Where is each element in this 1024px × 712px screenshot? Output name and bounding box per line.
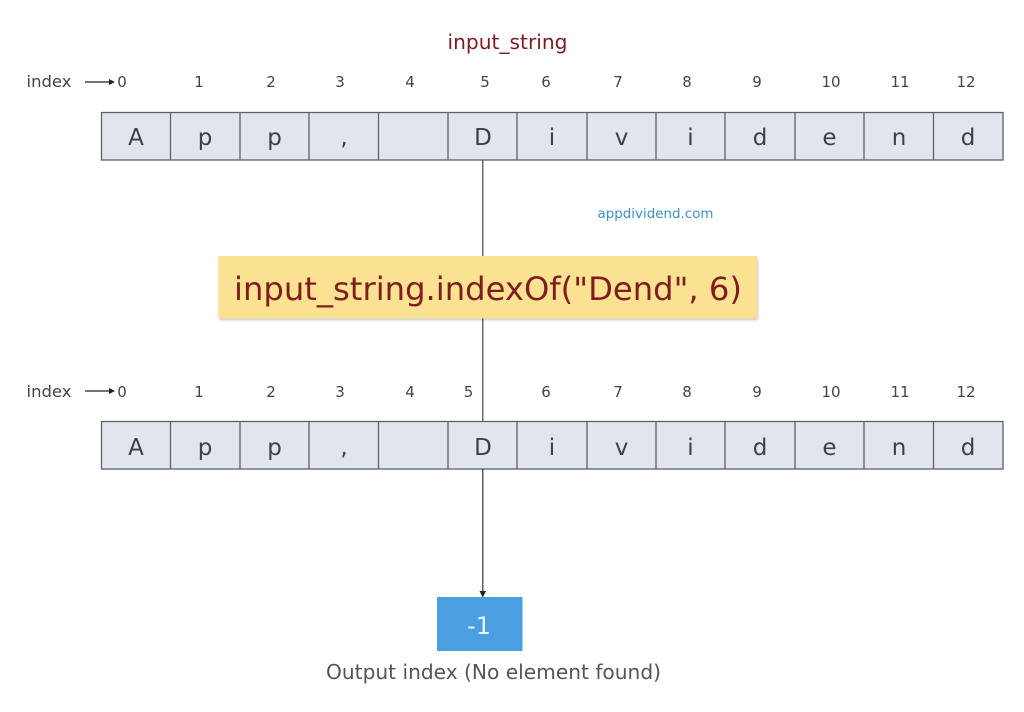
output box: -1: -1 [467,612,491,640]
bottom index row: 12 [956,383,976,401]
bottom index row: 10 [821,383,841,401]
connector: top array to second array [482,160,484,421]
bottom index row: 8 [682,383,692,401]
bottom character array: n [892,435,906,461]
callout: method call [218,256,758,320]
top index row: 1 [194,73,204,91]
top character array: i [687,125,694,151]
bottom index row: 1 [194,383,204,401]
top index row: index [26,72,72,91]
bottom index row: 0 [117,383,127,401]
bottom index row: index [26,382,72,401]
bottom character array: v [615,435,628,461]
bottom character array: D [474,435,492,461]
top character array: , [340,125,348,151]
top character array: d [753,125,767,151]
top character array: p [267,125,282,151]
bottom character array: i [687,435,694,461]
output label: Output index (No element found) [326,660,661,684]
bottom index row: 5 [464,383,473,401]
arrow: top index pointer [85,79,115,85]
top character array: d [961,125,975,151]
top index row: 7 [613,73,623,91]
top character array: v [615,125,628,151]
bottom character array: i [549,435,555,461]
bottom index row: 11 [890,383,910,401]
bottom index row: 4 [405,383,415,401]
bottom character array: , [340,435,348,461]
top index row: 3 [335,73,345,91]
top index row: 5 [480,73,490,91]
top index row: 11 [890,73,910,91]
top index row: 12 [956,73,976,91]
top character array [102,112,1003,160]
arrow: second array to output [480,469,486,598]
top index row: 6 [541,73,551,91]
top character array: e [822,125,837,151]
top index row: 0 [117,73,127,91]
bottom index row: 3 [335,383,345,401]
top index row: 8 [682,73,692,91]
bottom character array: p [267,435,282,461]
top character array: i [549,125,555,151]
bottom character array: A [128,435,144,461]
top index row: 4 [405,73,415,91]
top index row: 2 [266,73,276,91]
top index row [26,72,976,91]
bottom character array: e [822,435,837,461]
callout: method call: input_string.indexOf("Dend", 6) [234,270,742,308]
watermark: appdividend.com: appdividend.com [598,207,714,222]
bottom index row: 9 [752,383,762,401]
title: input_string: input_string [448,30,568,54]
top index row: 10 [821,73,841,91]
top character array: n [892,125,906,151]
bottom character array: d [753,435,767,461]
bottom index row [26,382,976,401]
bottom index row: 2 [266,383,276,401]
output box: -1 [437,597,522,651]
bottom character array [102,421,1003,469]
bottom index row: 6 [541,383,551,401]
bottom index row: 7 [613,383,623,401]
arrow: bottom index pointer [85,388,115,394]
bottom character array: p [198,435,212,461]
top character array: p [198,125,212,151]
top index row: 9 [752,73,762,91]
bottom character array: d [961,435,975,461]
top character array: A [128,125,144,151]
top character array: D [474,125,492,151]
